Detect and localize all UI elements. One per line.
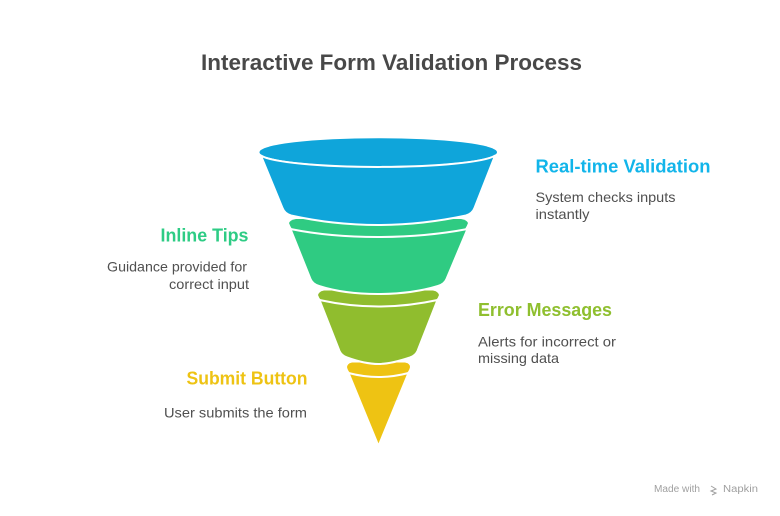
funnel segment: blue	[260, 138, 497, 225]
label: inline tips: correct input	[169, 276, 249, 292]
label: real-time validation: instantly	[536, 206, 590, 222]
label: inline tips	[107, 226, 249, 292]
label: real-time validation: Real-time Validation	[536, 156, 710, 176]
icon: napkin logo	[711, 486, 716, 495]
label: submit button	[164, 368, 308, 420]
label: real-time validation: System checks inputs	[536, 189, 676, 205]
funnel segment: yellow	[347, 362, 410, 446]
funnel segment: olive	[318, 290, 439, 364]
label: inline tips: Guidance provided for	[107, 258, 247, 274]
label: error messages: Alerts for incorrect or	[478, 334, 616, 350]
label: real-time validation	[536, 156, 710, 222]
label: inline tips: Inline Tips	[160, 226, 248, 246]
label: error messages: missing data	[478, 350, 559, 366]
attribution: Napkin	[723, 484, 758, 495]
title: Interactive Form Validation Process	[201, 50, 582, 75]
funnel segment: green	[289, 219, 468, 294]
attribution	[654, 484, 758, 495]
label: submit button: User submits the form	[164, 404, 307, 420]
label: error messages	[478, 300, 616, 366]
label: submit button: Submit Button	[186, 368, 308, 388]
attribution: Made with	[654, 484, 700, 495]
label: error messages: Error Messages	[478, 300, 612, 320]
funnel diagram	[260, 138, 497, 446]
